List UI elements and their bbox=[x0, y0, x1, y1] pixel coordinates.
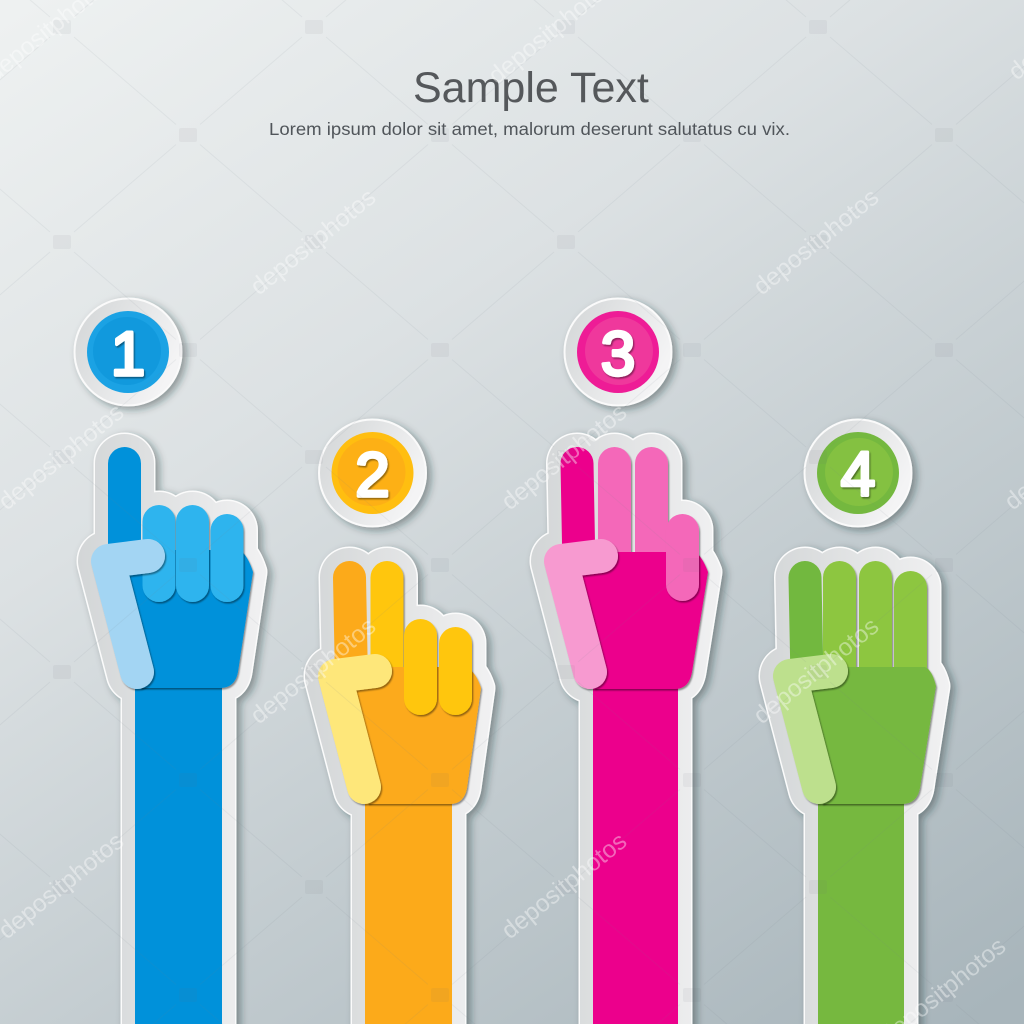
folded fingers 2 bbox=[420, 636, 456, 698]
raised fingers 4 bbox=[805, 578, 910, 680]
badge 1 bbox=[74, 298, 182, 406]
raised fingers 3 bbox=[577, 464, 652, 570]
thumb 4 bbox=[790, 671, 831, 787]
badge 3 bbox=[564, 298, 672, 406]
thumb 3 bbox=[561, 556, 601, 672]
step 1: blue hand with one finger bbox=[74, 298, 253, 1024]
palm 2 bbox=[352, 667, 481, 804]
arm 3 bbox=[593, 670, 678, 1024]
sticker outline 1 bbox=[108, 464, 253, 1024]
palm 4 bbox=[808, 667, 936, 804]
palm 1 bbox=[125, 550, 253, 688]
watermark text: depositphotos bbox=[497, 399, 632, 516]
badge 2 bbox=[318, 418, 427, 528]
watermark text: depositphotos bbox=[246, 613, 381, 730]
badge 2: 2 bbox=[355, 441, 390, 510]
watermark text: depositphotos bbox=[749, 613, 884, 730]
arm 2 bbox=[365, 790, 452, 1024]
step 4: green hand with four fingers bbox=[790, 418, 936, 1024]
badge 3: 3 bbox=[601, 320, 635, 389]
arm 4 bbox=[818, 790, 904, 1024]
title: Sample Text bbox=[413, 64, 649, 112]
folded finger 3 bbox=[666, 530, 699, 584]
thumb 1 bbox=[108, 556, 148, 672]
badge 4 bbox=[804, 418, 912, 528]
watermark text: depositphotos bbox=[749, 184, 884, 301]
arm 1 bbox=[135, 670, 222, 1024]
sticker outline 4 bbox=[790, 578, 936, 1024]
folded fingers 1 bbox=[159, 522, 227, 586]
badge 1: 1 bbox=[111, 320, 145, 389]
thumb 2 bbox=[335, 671, 375, 787]
sticker outline 2 bbox=[335, 578, 481, 1024]
index finger 1 bbox=[108, 464, 141, 570]
raised fingers 2 bbox=[350, 578, 387, 680]
step 2: orange hand with two fingers bbox=[318, 418, 481, 1024]
step 3: pink hand with three fingers bbox=[561, 298, 708, 1024]
watermark text: depositphotos bbox=[497, 828, 632, 945]
watermark text: depositphotos bbox=[246, 184, 381, 301]
subtitle: Lorem ipsum dolor sit amet, malorum deserunt salutatus cu vix. bbox=[269, 119, 790, 139]
sticker outline 3 bbox=[561, 464, 708, 1024]
badge 4: 4 bbox=[841, 440, 875, 509]
palm 3 bbox=[580, 552, 708, 689]
